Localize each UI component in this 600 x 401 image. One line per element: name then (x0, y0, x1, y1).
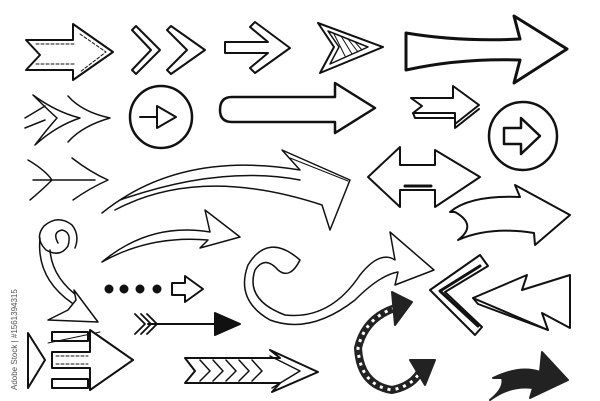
arrow: triple feathered (25, 95, 110, 145)
arrow: black solid (490, 352, 568, 400)
arrow: big swoosh (102, 150, 350, 230)
icon: circle with arrow (130, 86, 192, 148)
arrow: notched tail (28, 330, 133, 390)
icon: circle arrow (489, 102, 557, 170)
arrow: curved thin (102, 210, 240, 262)
arrow: feathered simple (28, 158, 108, 200)
arrow: double headed (368, 147, 480, 207)
watermark text: Adobe Stock | #1561394315 (10, 289, 19, 390)
arrow: feather (135, 313, 240, 335)
arrow: dotted stitched (26, 24, 113, 80)
arrow: big bold (406, 16, 567, 83)
arrow: triangle left (473, 275, 570, 330)
arrow: thin outline (225, 22, 290, 73)
arrow: 3D small (411, 86, 479, 128)
arrow: hatched arrowhead (318, 23, 383, 73)
arrow: spiral down (39, 220, 100, 343)
arrow: chevron striped (185, 350, 318, 392)
arrow: dark curved c (358, 292, 435, 390)
arrow: dots and arrow (106, 276, 203, 302)
arrow: double chevrons (132, 26, 205, 74)
arrow: long rounded (220, 83, 375, 133)
arrow: right sweep (450, 185, 570, 245)
arrow: chevron left (430, 255, 488, 335)
arrow: spiral wave (244, 232, 434, 324)
